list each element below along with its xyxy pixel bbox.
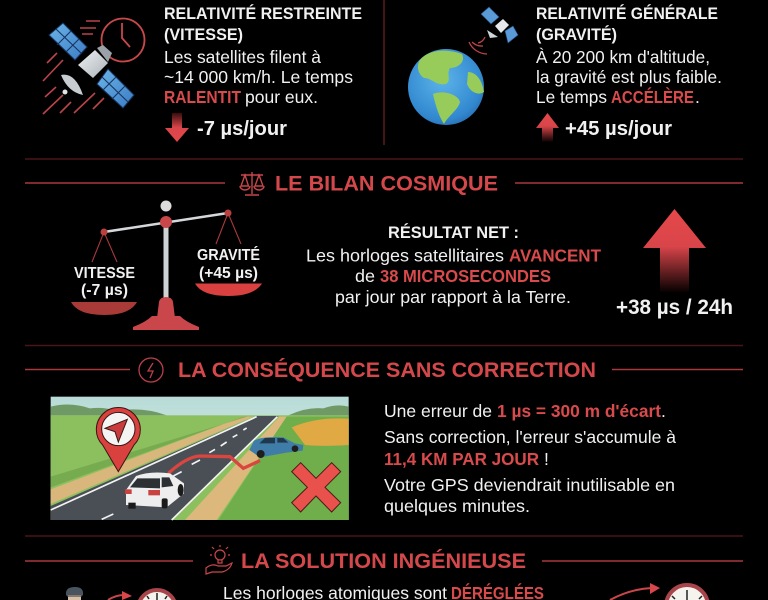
- net result text: [306, 223, 601, 307]
- vertical divider: [383, 0, 385, 145]
- label: vitesse: (-7 µs): [81, 282, 128, 299]
- consequence text: Une erreur de: [384, 401, 492, 421]
- subheading: (GRAVITÉ): [536, 25, 617, 44]
- label: gravité: (+45 µs): [199, 265, 258, 282]
- arrow head: [650, 583, 660, 594]
- description: RALENTIT: [164, 87, 241, 107]
- big arrow up: [643, 209, 706, 292]
- consequence text: Votre GPS deviendrait inutilisable en: [384, 475, 675, 495]
- panel: relativité générale: [408, 4, 722, 142]
- arrow to right clock: [610, 588, 652, 600]
- illustration: car leaving the road: [51, 397, 349, 520]
- consequence text: .: [661, 401, 666, 421]
- icon: engineer: [66, 587, 83, 600]
- consequence text: 11,4 KM PAR JOUR: [384, 449, 539, 469]
- description: ACCÉLÈRE: [611, 86, 694, 107]
- label: gravité: [197, 245, 260, 282]
- description: la gravité est plus faible.: [536, 67, 722, 87]
- heading: RELATIVITÉ RESTREINTE: [164, 4, 362, 23]
- description: .: [695, 87, 700, 107]
- heading: RELATIVITÉ GÉNÉRALE: [536, 4, 718, 23]
- description: [536, 47, 722, 107]
- section: la conséquence sans correction: [25, 358, 743, 382]
- icon: lightning circle: [139, 358, 163, 382]
- value: +45 µs/jour: [565, 118, 672, 140]
- icon: blue car: [249, 437, 303, 458]
- path of drift: [168, 456, 260, 473]
- description: Le temps: [536, 87, 607, 107]
- icon: scales: [240, 172, 264, 195]
- net result text: AVANCENT: [509, 246, 601, 266]
- arrow head: [122, 591, 132, 600]
- description: ~14 000 km/h. Le temps: [164, 67, 353, 87]
- label: vitesse: VITESSE: [74, 265, 135, 282]
- value: -7 µs/jour: [197, 118, 287, 140]
- description: À 20 200 km d'altitude,: [536, 47, 710, 67]
- icon: satellite with clock: [43, 18, 144, 114]
- consequence text: !: [544, 449, 549, 469]
- net result text: de: [355, 266, 375, 286]
- icon: earth and satellite: [408, 7, 518, 125]
- description: [164, 47, 353, 107]
- net result text: RÉSULTAT NET :: [388, 223, 519, 242]
- solution text: [223, 582, 544, 600]
- arrow down: [165, 113, 189, 142]
- heading: LE BILAN COSMIQUE: [275, 172, 498, 196]
- consequence text: Sans correction, l'erreur s'accumule à: [384, 427, 676, 447]
- arrow to left clock: [108, 595, 124, 600]
- subheading: (VITESSE): [164, 25, 243, 44]
- description: pour eux.: [245, 87, 318, 107]
- heading: LA SOLUTION INGÉNIEUSE: [241, 550, 526, 573]
- icon: left clock: [138, 590, 176, 600]
- icon: right clock: [666, 585, 708, 600]
- section: la solution ingénieuse: [25, 545, 743, 574]
- icon: red cross: [292, 463, 341, 512]
- consequence text: 1 µs = 300 m d'écart: [497, 401, 661, 421]
- icon: map pin: [96, 408, 140, 472]
- label: gravité: GRAVITÉ: [197, 245, 260, 264]
- icon: hand with bulb: [206, 545, 232, 574]
- net result text: Les horloges satellitaires: [306, 246, 504, 266]
- section: le bilan cosmique: [25, 172, 743, 196]
- icon: white car: [125, 472, 184, 509]
- net value: +38 µs / 24h: [616, 296, 733, 319]
- arrow up: [536, 113, 559, 142]
- net result text: par jour par rapport à la Terre.: [335, 287, 571, 307]
- consequence text: quelques minutes.: [384, 496, 530, 516]
- panel: relativité restreinte: [43, 4, 362, 142]
- description: Les satellites filent à: [164, 47, 321, 67]
- heading: LA CONSÉQUENCE SANS CORRECTION: [178, 359, 596, 382]
- consequence text: [384, 401, 676, 516]
- label: vitesse: [74, 265, 135, 299]
- chart: tilted balance: [71, 200, 262, 330]
- net result text: 38 MICROSECONDES: [380, 266, 551, 286]
